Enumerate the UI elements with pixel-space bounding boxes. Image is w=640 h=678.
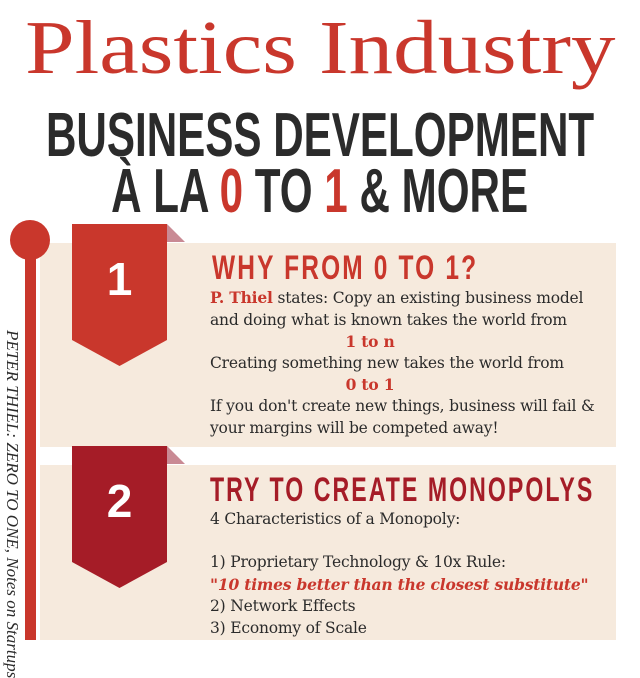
panel: why from 0 to 1 [40, 243, 616, 447]
heading 2: TRY TO CREATE MONOPOLYS [210, 471, 594, 509]
text block 1: 0 to 1 [346, 375, 394, 394]
badge 2: 2 [107, 475, 132, 527]
rotated source text: PETER THIEL: ZERO TO ONE, Notes on Startups [3, 330, 22, 678]
text block 1: If you don't create new things, business will fail & your margins will be competed away! [210, 397, 595, 437]
badge 1 [72, 224, 185, 366]
text block 1: Creating something new takes the world from [210, 354, 564, 372]
text block 2: "10 times better than the closest substitute" [210, 575, 588, 594]
text block 2: 4 Characteristics of a Monopoly: [210, 510, 460, 528]
badge 2 [72, 446, 185, 588]
text block 2: 2) Network Effects [210, 597, 355, 615]
subtitle line 2: À LA 0 TO 1 & MORE [112, 157, 528, 226]
text block 1: 1 to n [345, 332, 395, 351]
heading 1: WHY FROM 0 TO 1? [212, 249, 478, 287]
text block 2: 1) Proprietary Technology & 10x Rule: [210, 553, 506, 571]
title: Plastics Industry [25, 6, 615, 90]
text block 2 [210, 510, 588, 637]
text block 1 [210, 288, 595, 437]
badge 1: 1 [107, 253, 132, 305]
timeline dot [10, 220, 50, 260]
subtitle line 1: BUSINESS DEVELOPMENT [46, 101, 594, 170]
text block 2: 3) Economy of Scale [210, 619, 367, 637]
text block 1: P. Thiel states: Copy an existing business model and doing what is known takes the world from [210, 288, 583, 329]
panel: monopolys [40, 465, 616, 640]
timeline line [25, 240, 36, 640]
